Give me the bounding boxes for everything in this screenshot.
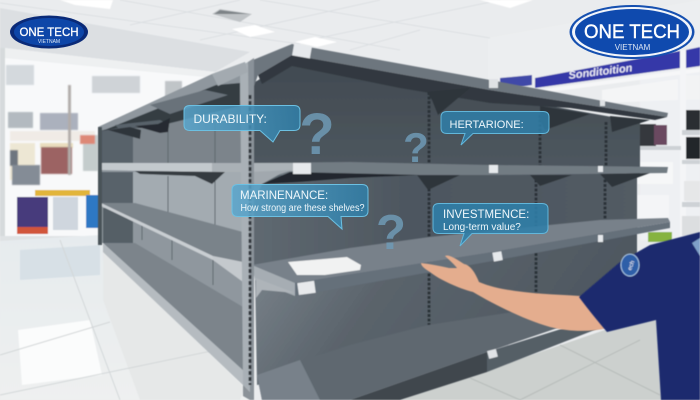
logo: large: VIETNAM — [615, 43, 651, 52]
left section shelf 1 — [100, 163, 245, 184]
callout: investment: Long-term value? — [443, 222, 521, 233]
floor left — [0, 235, 250, 400]
left section shelf 3 — [103, 243, 245, 387]
right store wall with AC units — [640, 70, 700, 240]
logo: large: ONE TECH — [584, 21, 680, 43]
callout: investment: INVESTMENCE: — [443, 209, 529, 221]
callout: durability: DURABILITY: — [194, 112, 267, 126]
shelf 2 — [248, 162, 668, 200]
callout: durability — [184, 106, 300, 142]
left section shelf 2 — [101, 203, 243, 282]
logo: small: ONE TECH — [20, 25, 78, 39]
callout: maintenance: How strong are these shelves? — [240, 203, 365, 214]
left end upright — [98, 127, 102, 245]
top shelf — [248, 44, 668, 132]
left section back panels — [100, 70, 245, 345]
shelving unit — [98, 44, 670, 400]
question mark 3: ? — [376, 206, 406, 260]
folded towel — [288, 257, 361, 275]
staff shirt: ech — [627, 260, 636, 271]
center upright — [240, 58, 254, 400]
ceiling lights — [60, 0, 113, 9]
callout: maintenance: MARINENANCE: — [240, 190, 328, 202]
question marks — [299, 102, 429, 260]
shelf 3 — [252, 218, 670, 298]
staff shirt — [579, 232, 700, 400]
banner: Sonditoition — [568, 62, 633, 82]
callout: maintenance — [232, 184, 368, 229]
callout: investment — [433, 204, 548, 246]
logo: large — [570, 5, 694, 59]
right section back panel lower — [252, 175, 637, 275]
callout: hertarione: HERTARIONE: — [450, 119, 524, 131]
left section top shelf — [98, 62, 245, 139]
posters — [17, 197, 48, 233]
wall above window — [0, 8, 250, 72]
floor right — [400, 310, 700, 400]
uprights of back panel — [429, 92, 606, 328]
bottom shelf — [257, 300, 640, 400]
logo: small: VIETNAM — [38, 39, 60, 45]
staff arm and hand — [421, 255, 608, 331]
question mark 1: ? — [299, 102, 335, 167]
callout: hertarione — [441, 112, 549, 145]
banner — [535, 47, 700, 88]
right section back panel upper — [250, 60, 640, 175]
logo: small — [10, 16, 88, 48]
right wall — [488, 0, 700, 85]
question mark 2: ? — [403, 124, 429, 171]
store window — [4, 48, 215, 237]
